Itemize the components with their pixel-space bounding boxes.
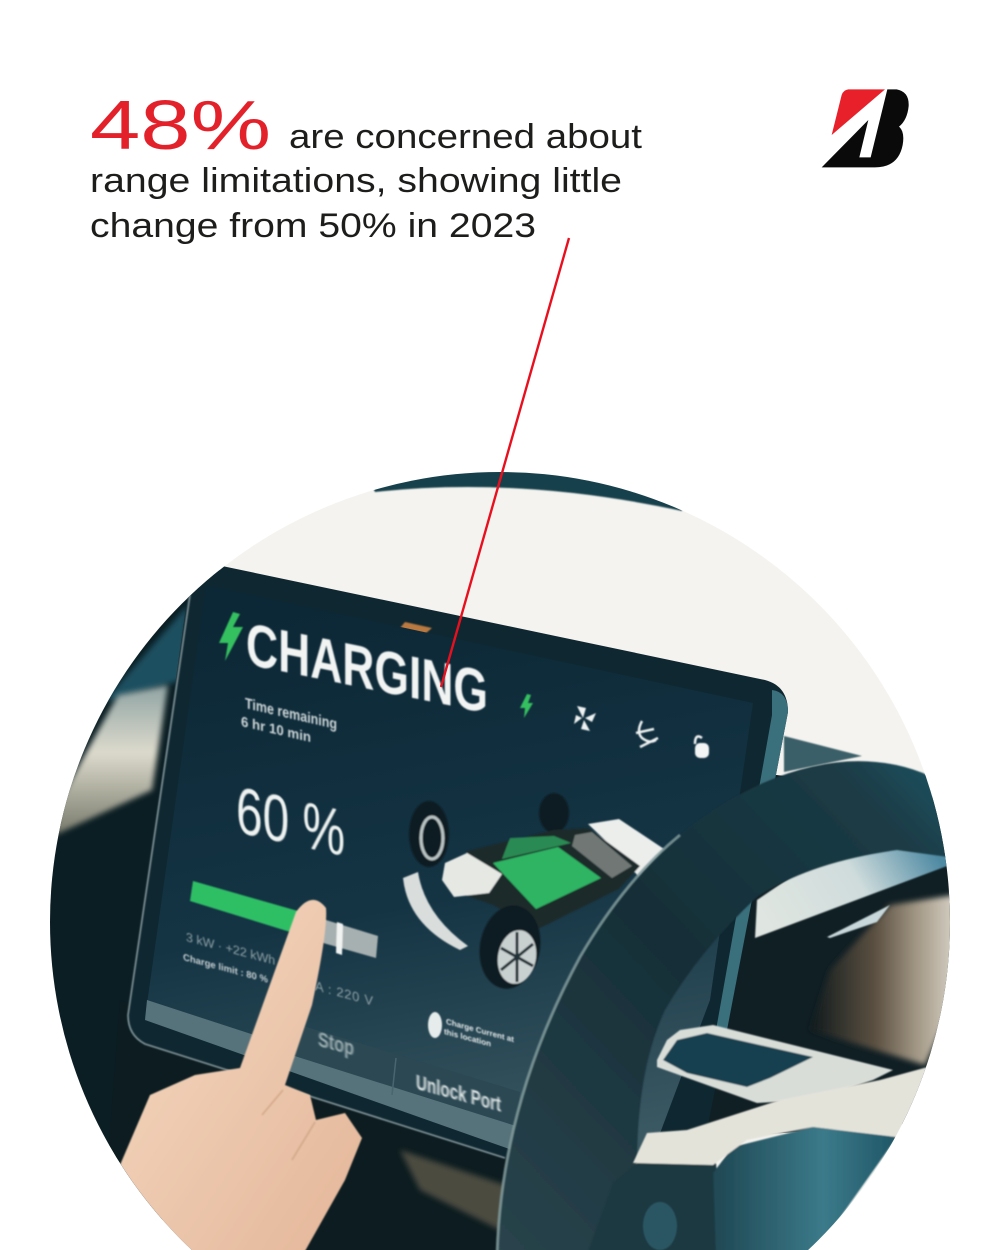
white body front xyxy=(588,819,664,878)
steering wheel rim xyxy=(497,761,970,1250)
icon: cable xyxy=(636,721,658,747)
icon: Bridgestone logo xyxy=(822,89,909,167)
unlock port button label: Unlock Port xyxy=(416,1070,501,1117)
stat value 48%: 48% xyxy=(90,86,271,164)
hand pointing xyxy=(120,900,362,1250)
screen xyxy=(145,585,753,1160)
bezel top reflections xyxy=(400,622,432,634)
time remaining text: Time remaining xyxy=(245,695,337,733)
battery green xyxy=(493,847,601,909)
charging stats text: Charge limit : 80 % xyxy=(183,952,268,986)
stat description line 2: range limitations, showing little xyxy=(90,162,622,200)
teal hub xyxy=(713,1127,897,1250)
under-screen dark area xyxy=(108,1033,508,1250)
teal wedge behind wheel xyxy=(784,736,862,772)
rear wheel xyxy=(409,801,449,867)
icon: small bolt xyxy=(520,694,533,718)
stop button label: Stop xyxy=(318,1027,354,1061)
rim light edge xyxy=(497,835,680,1250)
60 percent: 60 % xyxy=(236,774,345,871)
charge connector note: this location xyxy=(444,1027,491,1049)
bottom button strip xyxy=(145,1000,515,1150)
spoke xyxy=(633,1065,935,1165)
screen heading: CHARGING xyxy=(246,610,488,726)
callout leader line xyxy=(441,238,569,687)
stat description line 1: are concerned about xyxy=(289,118,643,156)
charging stats text: A : 220 V xyxy=(315,978,373,1009)
left dark side of cabin xyxy=(50,570,220,1220)
progress bar xyxy=(190,881,378,958)
steering wheel spoke and hub xyxy=(585,1065,935,1250)
charge connector note xyxy=(428,1012,514,1049)
white motor cover xyxy=(442,853,502,897)
bezel outer edge highlights xyxy=(128,595,505,1158)
dashboard background xyxy=(224,487,924,1210)
icon: green bolt xyxy=(219,612,243,661)
charge connector note: Charge Current at xyxy=(446,1017,514,1044)
charging stats text: 3 kW · +22 kWh xyxy=(186,929,275,968)
turn signal stalk xyxy=(657,1025,893,1103)
far wheel xyxy=(539,793,569,833)
right dark area behind wheel xyxy=(708,774,950,1134)
car chassis graphic xyxy=(403,793,664,994)
stat description line 3: change from 50% in 2023 xyxy=(90,207,536,245)
headline statistic xyxy=(90,86,643,245)
charging stats text xyxy=(183,929,373,1009)
chassis tray xyxy=(450,828,640,930)
hub button xyxy=(643,1202,677,1250)
screen heading xyxy=(218,611,486,712)
dark hub xyxy=(585,1163,725,1250)
screen icons xyxy=(520,694,709,758)
photo: car dashboard touchscreen in circle xyxy=(40,460,970,1250)
white dash panel behind wheel xyxy=(755,845,947,938)
left air vents xyxy=(105,605,188,700)
dark windshield edge at top of dashboard xyxy=(373,472,683,512)
icon: fan xyxy=(574,706,596,731)
icon: lock xyxy=(695,736,709,758)
front electronics xyxy=(572,832,632,878)
silver trim on left xyxy=(55,685,168,835)
fender xyxy=(403,872,468,950)
screen bezel xyxy=(128,566,788,1165)
wood trim xyxy=(810,895,955,1065)
time remaining text xyxy=(241,695,337,746)
button divider xyxy=(392,1058,396,1095)
time remaining text: 6 hr 10 min xyxy=(241,714,311,746)
battery compartments xyxy=(502,836,571,859)
bezel right edge teal xyxy=(716,690,788,1030)
front wheel xyxy=(478,906,541,990)
